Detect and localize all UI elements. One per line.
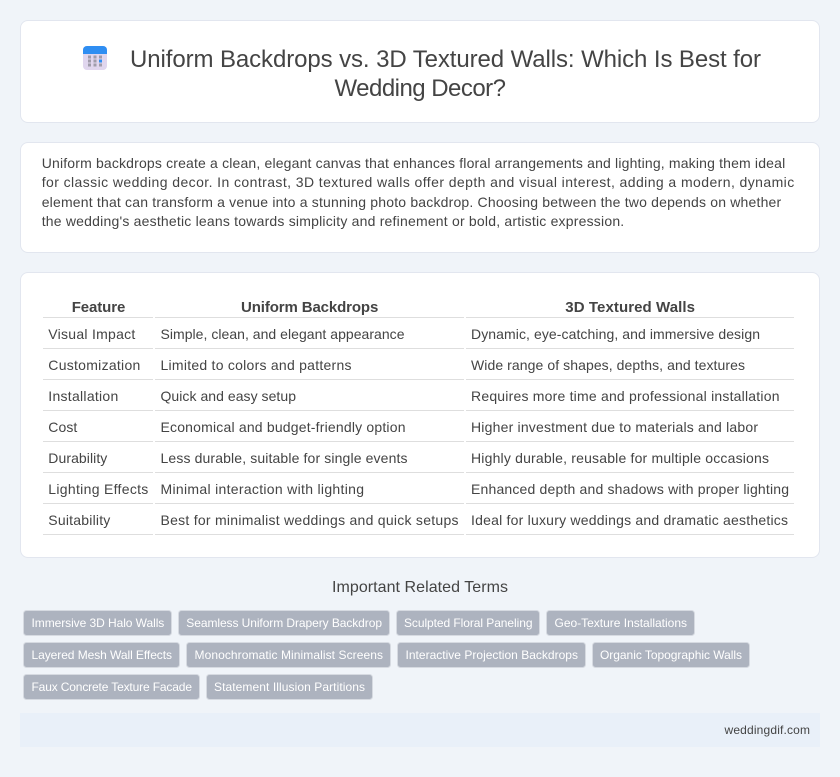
footer source: weddingdif.com — [724, 723, 810, 737]
related terms tags: Faux Concrete Texture Facade — [32, 680, 192, 694]
related terms tags: Sculpted Floral Paneling — [404, 616, 532, 630]
comparison table: Wide range of shapes, depths, and textures — [471, 357, 745, 373]
related terms tags: Seamless Uniform Drapery Backdrop — [186, 616, 382, 630]
comparison table: Best for minimalist weddings and quick setups — [160, 512, 458, 528]
comparison table: Lighting Effects — [48, 481, 148, 497]
comparison table: Customization — [48, 357, 140, 373]
comparison table: Durability — [48, 450, 107, 466]
title — [130, 46, 761, 102]
intro paragraph: the wedding's aesthetic leans towards simplicity and refinement or bold, artistic expression. — [42, 213, 624, 229]
comparison table: Uniform Backdrops — [241, 299, 378, 316]
comparison table: Highly durable, reusable for multiple occasions — [471, 450, 769, 466]
comparison table: Minimal interaction with lighting — [160, 481, 364, 497]
comparison table: Ideal for luxury weddings and dramatic aesthetics — [471, 512, 788, 528]
comparison table: Limited to colors and patterns — [160, 357, 352, 373]
intro paragraph: for classic wedding decor. In contrast, 3D textured walls offer depth and visual interest, adding a modern, dynamic — [42, 174, 794, 190]
comparison table: Less durable, suitable for single events — [160, 450, 408, 466]
comparison table: Installation — [48, 388, 118, 404]
intro paragraph: element that can transform a venue into a stunning photo backdrop. Choosing between the two depends on whether — [42, 194, 782, 210]
related terms tags: Monochromatic Minimalist Screens — [194, 648, 383, 662]
intro paragraph — [42, 155, 794, 229]
related terms tags: Statement Illusion Partitions — [214, 680, 365, 694]
comparison table: Enhanced depth and shadows with proper lighting — [471, 481, 789, 497]
comparison table panel — [20, 272, 820, 558]
comparison table: Requires more time and professional installation — [471, 388, 780, 404]
related terms heading: Important Related Terms — [332, 579, 508, 596]
intro paragraph: Uniform backdrops create a clean, elegant canvas that enhances floral arrangements and lighting, making them ideal — [42, 155, 785, 171]
related terms tags — [23, 610, 750, 700]
related terms tags: Organic Topographic Walls — [600, 648, 742, 662]
comparison table: Simple, clean, and elegant appearance — [160, 326, 405, 342]
related terms tags: Interactive Projection Backdrops — [406, 648, 578, 662]
icon: calendar — [83, 46, 107, 70]
comparison table: Cost — [48, 419, 77, 435]
comparison table: Visual Impact — [48, 326, 135, 342]
intro text panel — [20, 142, 820, 253]
comparison table: Economical and budget-friendly option — [160, 419, 406, 435]
title: Uniform Backdrops vs. 3D Textured Walls: Which Is Best for — [130, 46, 761, 73]
comparison table — [43, 299, 794, 535]
comparison table: Higher investment due to materials and labor — [471, 419, 758, 435]
header panel — [20, 20, 820, 123]
related terms tags: Immersive 3D Halo Walls — [32, 616, 164, 630]
footer bar — [20, 713, 820, 747]
comparison table: Feature — [72, 299, 125, 316]
related terms tags: Geo-Texture Installations — [554, 616, 687, 630]
title: Wedding Decor? — [334, 75, 506, 102]
comparison table: 3D Textured Walls — [565, 299, 695, 316]
comparison table: Quick and easy setup — [160, 388, 296, 404]
comparison table: Dynamic, eye-catching, and immersive design — [471, 326, 760, 342]
related terms tags: Layered Mesh Wall Effects — [32, 648, 172, 662]
comparison table: Suitability — [48, 512, 110, 528]
